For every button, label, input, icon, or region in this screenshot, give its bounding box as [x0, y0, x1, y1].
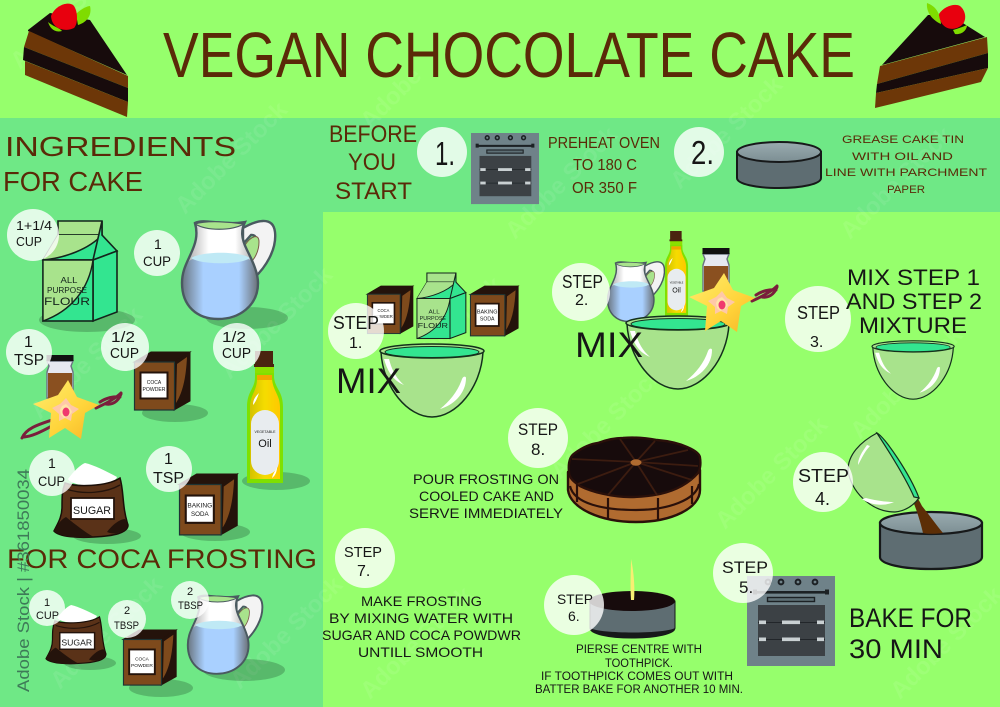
- icon: flour carton: PURPOSE: [420, 316, 447, 322]
- icon: frosted whole cake: [568, 438, 700, 522]
- badge: step 2: STEP: [562, 272, 603, 292]
- badge: step 1: STEP: [333, 313, 379, 333]
- text: mix step 1 and 2: [846, 265, 982, 338]
- step 7 group: [322, 528, 521, 660]
- watermark pattern: Adobe Stock: [225, 571, 348, 694]
- watermark pattern: Adobe Stock: [355, 581, 478, 704]
- quantity: 1/2 cup oil: [213, 323, 261, 371]
- step 6 group: [535, 559, 743, 696]
- icon: tin with batter and toothpick: [589, 559, 675, 638]
- text: grease cake tin: GREASE CAKE TIN: [842, 134, 964, 146]
- icon: flour carton: FLOUR: [44, 296, 90, 308]
- heading: before you start: BEFORE: [329, 121, 417, 148]
- icon: oil bottle: Oil: [672, 287, 681, 294]
- quantity: 2 tbsp water: 2: [187, 586, 193, 598]
- text: make frosting: SUGAR AND COCA POWDWR: [322, 627, 521, 643]
- quantity: 1 cup frosting sugar: CUP: [36, 610, 59, 622]
- text: preheat oven: TO 180 C: [573, 157, 637, 174]
- icon: frosting sugar sack: [46, 605, 106, 664]
- icon: baking soda box: SODA: [191, 511, 209, 518]
- icon: frosting sugar sack: SUGAR: [61, 637, 92, 647]
- quantity: 1/2 cup coca: 1/2: [111, 329, 135, 346]
- badge: step 5: [713, 543, 773, 603]
- text: pour frosting: SERVE IMMEDIATELY: [409, 505, 564, 521]
- badge: step 7: [335, 528, 395, 588]
- icon: mixing bowl: [872, 341, 954, 399]
- watermark pattern: Adobe Stock: [215, 261, 338, 384]
- watermark pattern: Adobe Stock: [665, 71, 788, 194]
- heading: ingredients for cake: [3, 131, 236, 197]
- step 4 group: [793, 433, 982, 569]
- text: pierse centre: PIERSE CENTRE WITH: [576, 644, 702, 656]
- text: mix: MIX: [575, 326, 643, 365]
- heading: for coca frosting: FOR COCA FROSTING: [7, 544, 317, 574]
- heading: before you start: YOU: [348, 149, 396, 176]
- icon: oil bottle: [247, 351, 283, 483]
- quantity: 2 tbsp coca: 2: [124, 605, 130, 617]
- quantity: 1/2 cup oil: 1/2: [222, 329, 246, 346]
- watermark pattern: Adobe Stock: [385, 271, 508, 394]
- quantity: 1 cup sugar: 1: [48, 455, 56, 471]
- icon: coca powder box: [134, 352, 190, 410]
- text: preheat oven: [548, 135, 660, 197]
- badge: 1: [417, 127, 467, 177]
- quantity: 1 cup frosting sugar: 1: [44, 597, 50, 609]
- badge: 2: [674, 127, 724, 177]
- icon: cake slice right: [875, 3, 988, 108]
- icon: flour carton: PURPOSE: [47, 286, 87, 295]
- icon: frosting coca box: [123, 630, 176, 685]
- quantity: 1 tsp vanilla: TSP: [14, 352, 44, 369]
- icon: coca powder box: COCA: [147, 380, 162, 386]
- quantity: 1 tsp soda: TSP: [153, 470, 184, 487]
- badge: step 7: 7.: [357, 563, 370, 580]
- icon: baking soda box: BAKING: [187, 503, 212, 510]
- watermark pattern: Adobe Stock: [25, 301, 148, 424]
- quantity: 1+1/4 cup: CUP: [16, 234, 42, 249]
- icon: oven: [747, 576, 835, 666]
- quantity: 1+1/4 cup: [7, 209, 59, 261]
- badge: step 2: 2.: [575, 292, 588, 309]
- text: mix step 1 and 2: MIX STEP 1: [847, 265, 980, 290]
- text: pierse centre: TOOTHPICK.: [605, 658, 673, 670]
- quantity: 1/2 cup coca: CUP: [110, 345, 139, 362]
- icon: cake slice left: [23, 4, 128, 117]
- badge: step 6: STEP: [557, 591, 593, 607]
- badge: step 6: 6.: [568, 608, 580, 624]
- text: pour frosting: [409, 471, 564, 521]
- quantity: 1 tsp soda: [146, 446, 192, 492]
- step 8 group: [409, 408, 700, 522]
- quantity: 1 cup water: [134, 230, 180, 276]
- text: pour frosting: COOLED CAKE AND: [419, 488, 554, 504]
- badge: step 8: 8.: [531, 440, 545, 459]
- step 3 group: [785, 265, 982, 399]
- watermark pattern: Adobe Stock: [710, 411, 833, 534]
- icon: vanilla jar and flower: [22, 355, 121, 439]
- icon: tilted bowl: [848, 433, 919, 512]
- text: make frosting: [322, 593, 521, 660]
- icon: sugar sack: SUGAR: [73, 505, 111, 517]
- badge: step 3: STEP: [797, 303, 840, 323]
- quantity: 1 cup water: CUP: [143, 253, 171, 269]
- stock id watermark: Adobe Stock | #361850034: [14, 469, 33, 692]
- heading: ingredients for cake: INGREDIENTS: [5, 131, 236, 162]
- panel: ingredients: [0, 118, 323, 707]
- quantity: 2 tbsp coca: [108, 600, 146, 638]
- text: mix: MIX: [336, 362, 401, 401]
- text: grease cake tin: LINE WITH PARCHMENT: [825, 167, 987, 179]
- text: preheat oven: OR 350 F: [572, 180, 637, 197]
- text: grease cake tin: [825, 134, 987, 196]
- badge: step 3: [785, 286, 851, 352]
- icon: oil bottle: Oil: [258, 438, 272, 450]
- text: bake for 30 min: 30 MIN: [849, 634, 943, 664]
- icon: oil bottle: VEGETABLE: [670, 281, 684, 284]
- step 2 group: [552, 231, 777, 389]
- icon: flour carton: [43, 221, 117, 321]
- text: bake for 30 min: [849, 603, 972, 664]
- icon: flour carton: FLOUR: [418, 321, 448, 330]
- text: preheat oven: PREHEAT OVEN: [548, 135, 660, 152]
- quantity: 1+1/4 cup: 1+1/4: [16, 218, 52, 233]
- badge: step 4: STEP: [798, 466, 849, 486]
- icon: frosting coca box: COCA: [135, 656, 150, 662]
- badge: 1: 1.: [435, 135, 455, 172]
- text: grease cake tin: PAPER: [887, 184, 925, 196]
- icon: vanilla flower: [689, 273, 755, 332]
- icon: soda box: BAKING: [477, 310, 498, 316]
- background: header band: [0, 0, 1000, 118]
- quantity: 1 tsp vanilla: 1: [24, 334, 33, 351]
- icon: coca powder box: POWDER: [142, 387, 166, 393]
- badge: step 8: [508, 408, 568, 468]
- icon: mixing bowl: [626, 316, 730, 389]
- step 5 group: [713, 543, 972, 666]
- icon: flour carton: [417, 273, 466, 338]
- title: VEGAN CHOCOLATE CAKE: [163, 19, 855, 91]
- icon: cake tin: [880, 512, 982, 569]
- icon: flour carton: ALL: [60, 276, 78, 285]
- badge: step 7: STEP: [344, 544, 382, 561]
- badge: step 4: [793, 452, 853, 512]
- badge: step 1: [328, 303, 384, 359]
- badge: step 2: [552, 263, 610, 321]
- icon: baking soda box: [179, 474, 237, 535]
- text: make frosting: BY MIXING WATER WITH: [329, 610, 513, 626]
- quantity: 1 cup water: 1: [154, 236, 162, 252]
- quantity: 2 tbsp coca: TBSP: [114, 620, 139, 632]
- icon: batter stream: [903, 480, 943, 534]
- icon: oil bottle: [665, 231, 688, 315]
- text: pierse centre: BATTER BAKE FOR ANOTHER 10 MIN.: [535, 684, 743, 696]
- text: mix step 1 and 2: AND STEP 2: [846, 289, 982, 314]
- badge: step 8: STEP: [518, 420, 558, 439]
- badge: step 6: [544, 575, 604, 635]
- badge: step 3: 3.: [810, 334, 823, 351]
- quantity: 2 tbsp water: TBSP: [178, 600, 203, 612]
- icon: flour carton: ALL: [429, 310, 440, 316]
- text: bake for 30 min: BAKE FOR: [849, 603, 972, 633]
- quantity: 1 tsp vanilla: [6, 329, 52, 375]
- quantity: 1/2 cup oil: CUP: [222, 345, 251, 362]
- watermark pattern: Adobe Stock: [45, 571, 168, 694]
- step 1 group: [328, 273, 518, 417]
- icon: cake tin: [737, 142, 821, 188]
- icon: water jug: [608, 262, 664, 322]
- icon: sugar sack: [54, 463, 128, 538]
- badge: step 4: 4.: [815, 489, 830, 509]
- watermark pattern: Adobe: [355, 62, 427, 134]
- quantity: 2 tbsp water: [171, 581, 209, 619]
- icon: frosting water jug: [188, 595, 262, 674]
- badge: step 1: 1.: [349, 335, 362, 352]
- text: make frosting: UNTILL SMOOTH: [358, 644, 483, 660]
- heading: ingredients for cake: FOR CAKE: [3, 166, 143, 197]
- text: mix step 1 and 2: MIXTURE: [859, 313, 967, 338]
- watermark pattern: Adobe Stock: [500, 121, 623, 244]
- icon: vanilla jar: [702, 248, 777, 301]
- text: grease cake tin: WITH OIL AND: [852, 151, 953, 163]
- heading: before you start: [329, 121, 417, 205]
- icon: water jug: [182, 221, 275, 319]
- text: make frosting: MAKE FROSTING: [361, 593, 482, 609]
- icon: coca box: [367, 286, 413, 334]
- item shadows: [39, 307, 310, 697]
- text: pour frosting: POUR FROSTING ON: [413, 471, 559, 487]
- heading: before you start: START: [335, 178, 412, 205]
- watermark pattern: Adobe Stock: [845, 321, 968, 444]
- quantity: 1 tsp soda: 1: [164, 451, 173, 468]
- icon: oil bottle: VEGETABLE: [254, 430, 276, 434]
- watermark pattern: Adobe Stock: [835, 121, 958, 244]
- quantity: 1 cup sugar: CUP: [38, 473, 65, 489]
- badge: 2: 2.: [691, 134, 714, 171]
- icon: oven preheat: [471, 133, 539, 204]
- text: pierse centre: IF TOOTHPICK COMES OUT WITH: [541, 671, 733, 683]
- icon: coca box: POWDER: [374, 314, 393, 319]
- watermark pattern: Adobe Stock: [545, 361, 668, 484]
- icon: soda box: SODA: [480, 316, 495, 322]
- badge: step 5: STEP: [722, 558, 768, 577]
- badge: step 5: 5.: [739, 578, 753, 597]
- watermark pattern: Adobe Stock: [170, 96, 293, 219]
- quantity: 1 cup sugar: [29, 450, 75, 496]
- icon: frosting coca box: POWDER: [131, 663, 154, 669]
- panel: before you start: [323, 118, 1000, 212]
- icon: coca box: COCA: [377, 308, 390, 313]
- panel: steps: [323, 212, 1000, 707]
- text: pierse centre: [535, 644, 743, 696]
- icon: soda box: [470, 286, 518, 336]
- quantity: 1/2 cup coca: [101, 323, 149, 371]
- quantity: 1 cup frosting sugar: [29, 590, 65, 626]
- icon: mixing bowl: [380, 344, 484, 417]
